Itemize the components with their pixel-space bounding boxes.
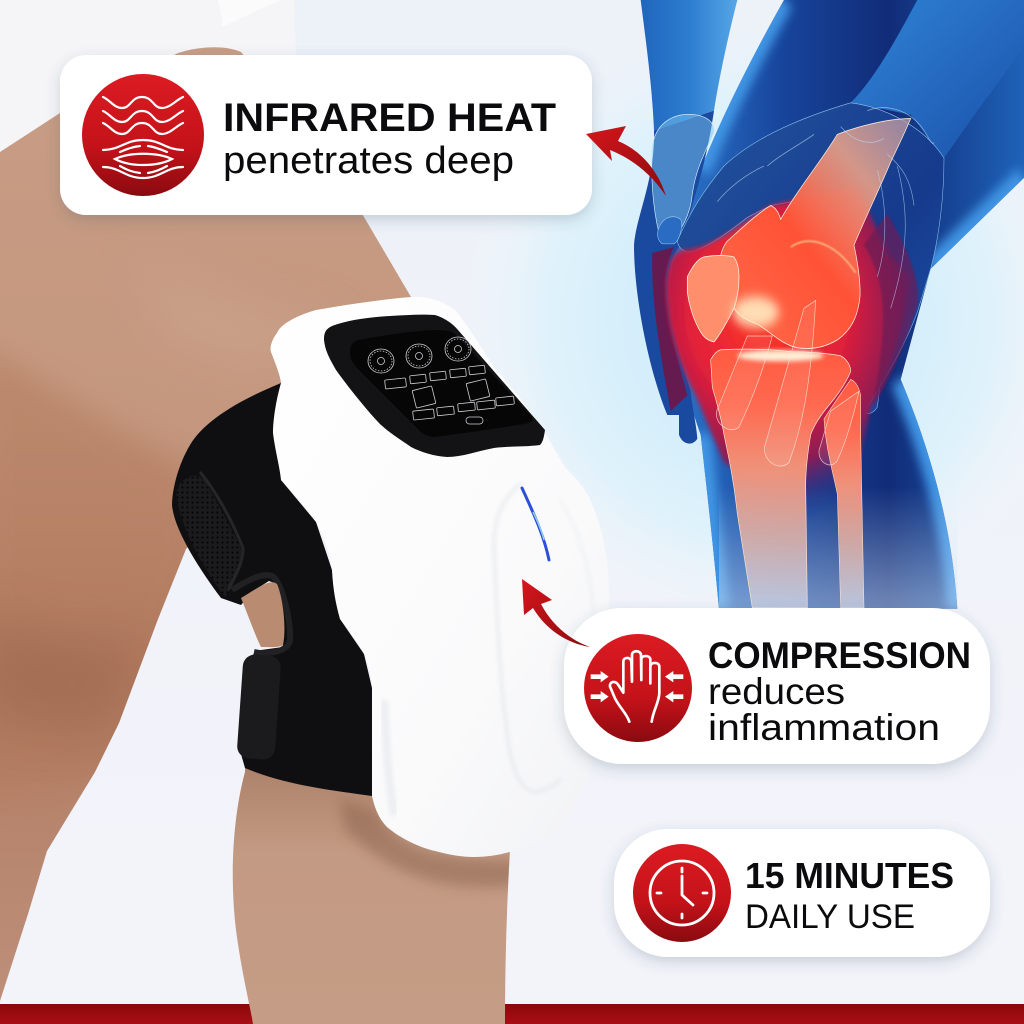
leg: thigh and rear leg [0, 47, 411, 1001]
strap hole ring [232, 575, 290, 653]
knee anatomy illustration [634, 0, 1024, 609]
wrist bones [652, 114, 714, 237]
strap mesh pad [176, 476, 241, 597]
femur [719, 119, 911, 349]
text: inflammation: inflammation [708, 707, 940, 748]
joint highlights [732, 296, 779, 328]
callout: daily use [614, 829, 990, 957]
icon: clock [633, 844, 731, 942]
bottom red bar [0, 1004, 1024, 1024]
strap hole skin [241, 582, 284, 647]
right fingers maroon [864, 213, 918, 407]
femur arc highlight [791, 241, 856, 273]
left hand [634, 111, 714, 444]
knee strap [172, 383, 372, 796]
icon: heat waves and muscle [82, 74, 204, 196]
lower leg fade [719, 486, 957, 609]
callout: compression [564, 608, 990, 764]
patella [687, 255, 739, 342]
leg silhouette [668, 0, 1024, 609]
left forearm [641, 0, 737, 130]
left thumb [657, 217, 682, 244]
text: reduces: reduces [708, 671, 845, 712]
heading: compression: COMPRESSION [708, 635, 971, 676]
right hand back [677, 103, 944, 414]
overlay fingers [716, 300, 859, 466]
right hand bones [717, 108, 934, 308]
leg: lower calf [233, 760, 520, 1024]
left fingers maroon [652, 247, 687, 411]
panel buttons [368, 337, 514, 424]
text: daily use: DAILY USE [745, 898, 915, 936]
icon: hand with compression arrows [584, 634, 692, 742]
strap mesh texture [176, 476, 241, 597]
blue LED strip [522, 488, 549, 560]
subheading: penetrates deep: penetrates deep [223, 140, 514, 182]
tibia [711, 349, 851, 608]
fibula [824, 379, 864, 608]
strap side tab [236, 654, 282, 760]
arrow to device [522, 579, 590, 647]
heading: 15 minutes: 15 MINUTES [745, 855, 954, 896]
arrow to anatomy [586, 126, 666, 196]
device body [271, 297, 609, 857]
control panel [324, 315, 545, 457]
strap upper tab edge [200, 472, 243, 590]
right forearm [851, 0, 1024, 158]
callout: infrared heat [60, 55, 592, 215]
white shorts [0, 0, 296, 152]
leg rim light [701, 0, 1024, 609]
heading: infrared heat: INFRARED HEAT [223, 96, 556, 140]
heat glow [666, 186, 911, 518]
